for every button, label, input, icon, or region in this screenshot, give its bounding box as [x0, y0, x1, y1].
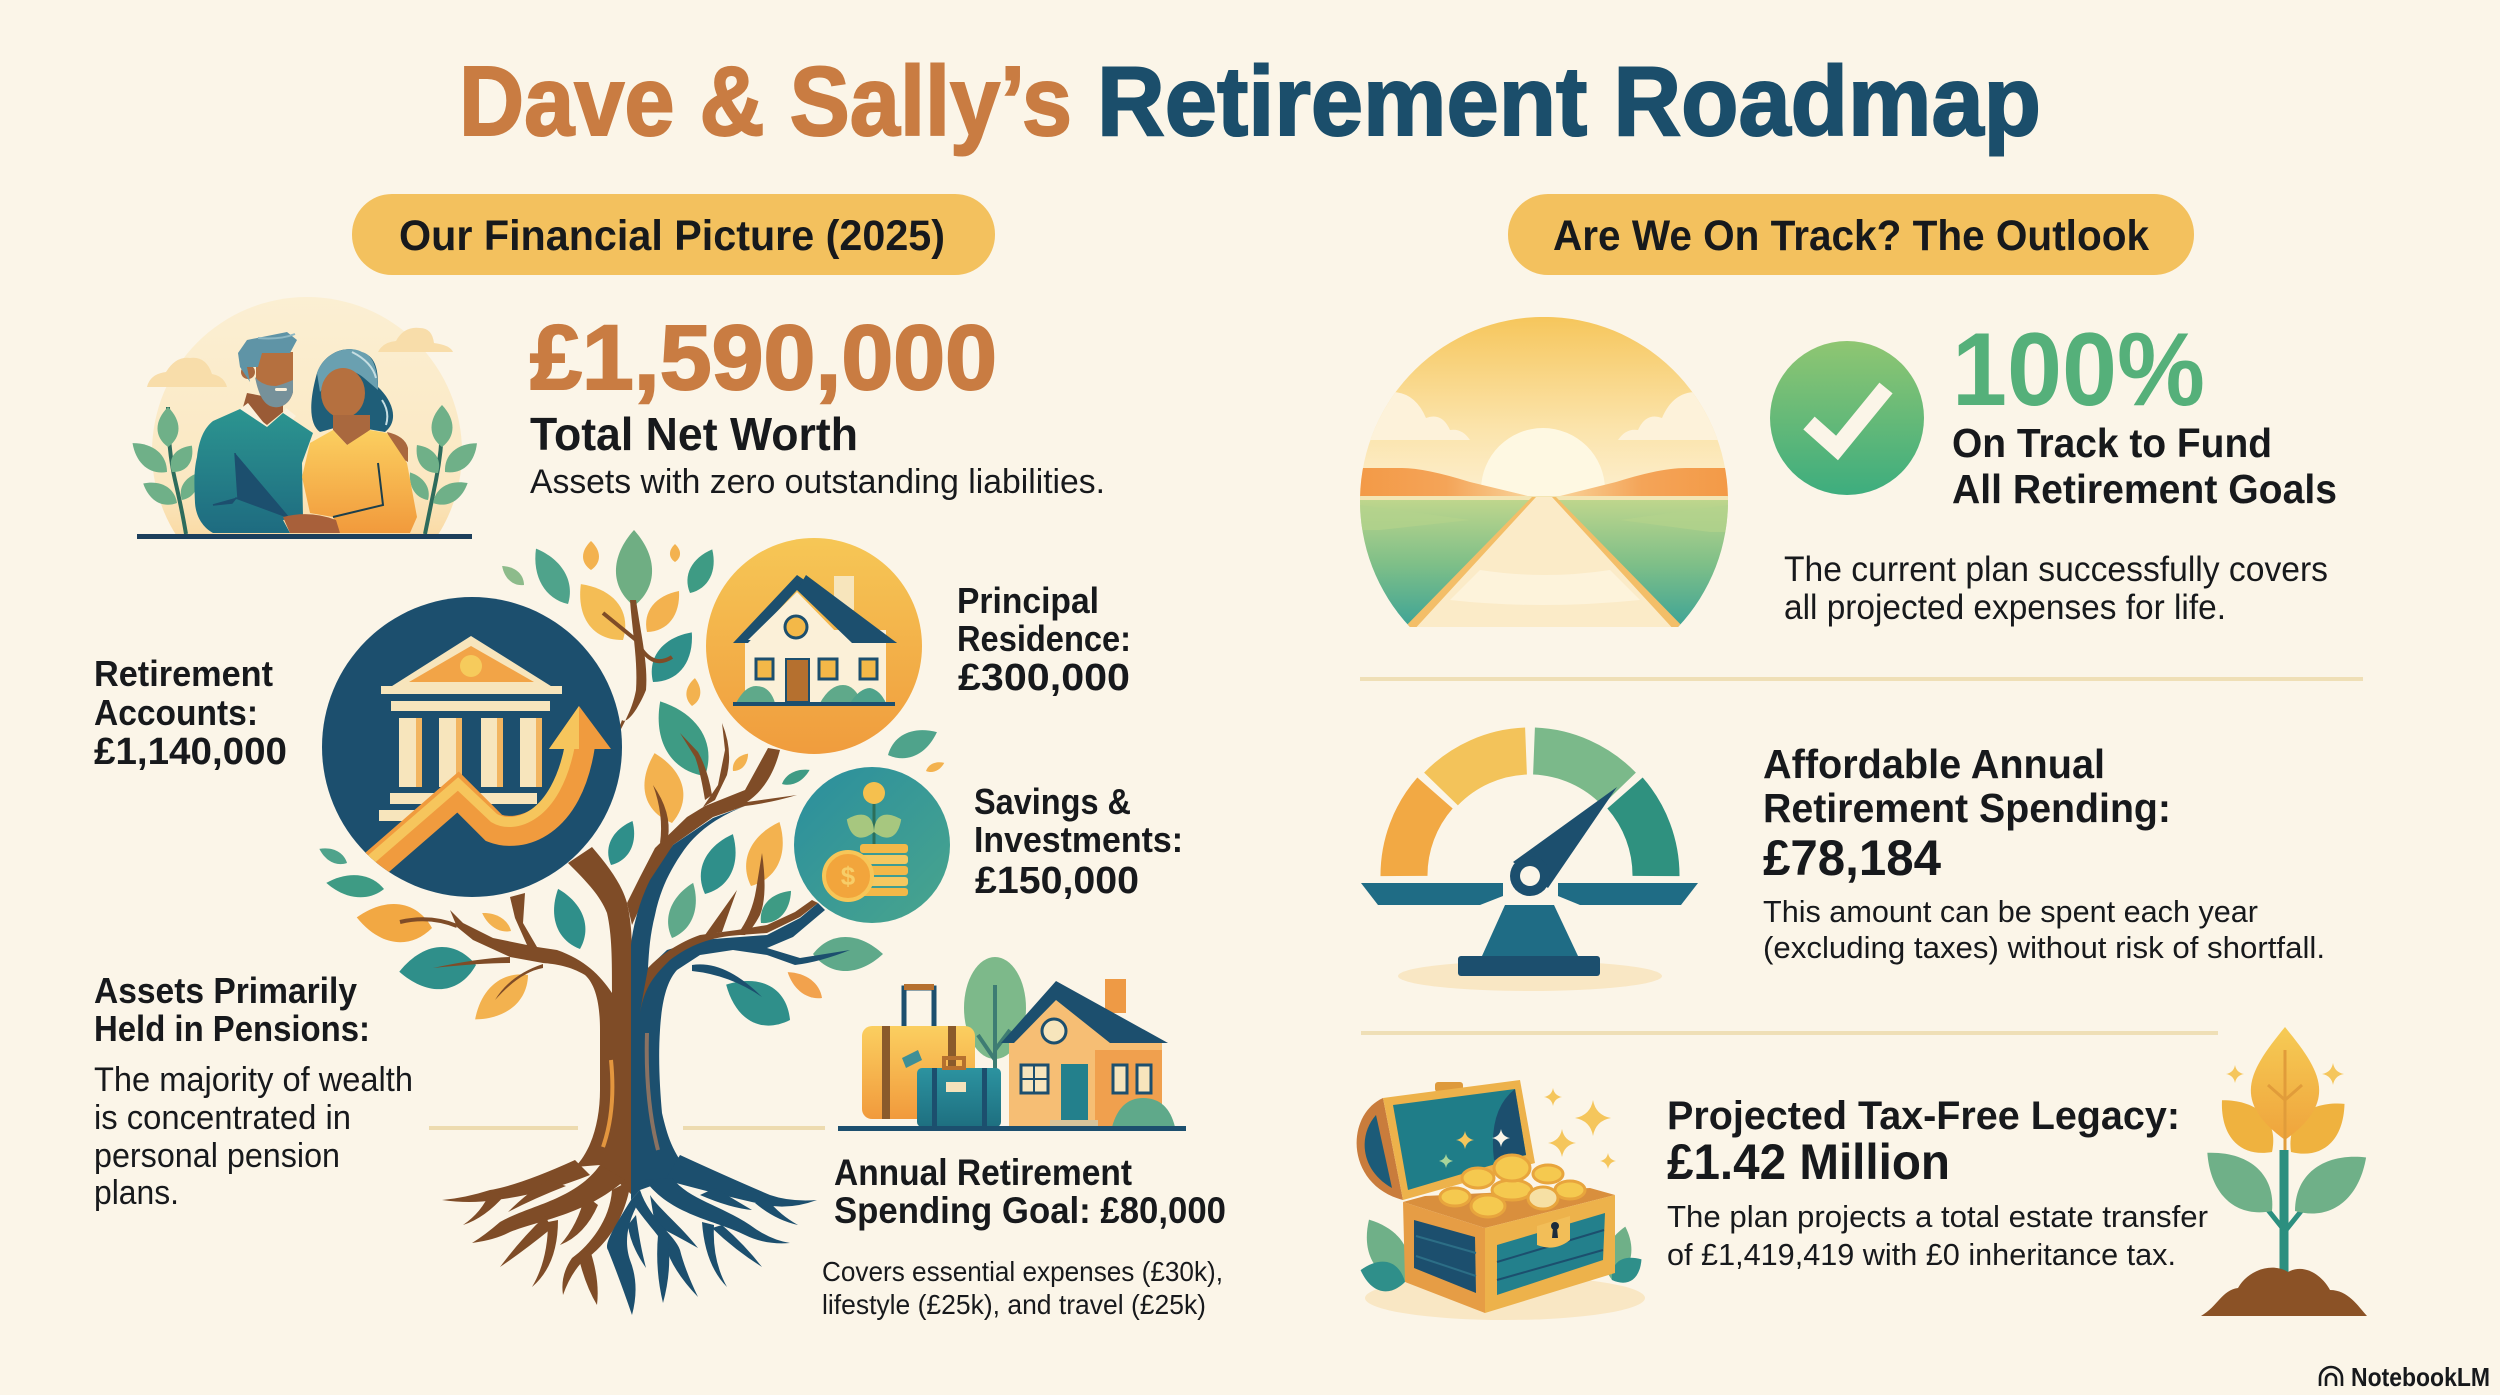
label: savings and investments: £150,000: [975, 860, 1139, 902]
text: tax-free legacy: The plan projects a total estate transfer: [1667, 1199, 2208, 1234]
text: assets primarily held in pensions: The majority of wealth: [94, 1061, 413, 1099]
text: affordable annual spending: £78,184: [1763, 830, 1941, 886]
text: assets primarily held in pensions: Assets Primarily: [94, 970, 357, 1011]
text: assets primarily held in pensions: plans.: [94, 1174, 179, 1212]
label: retirement accounts: Retirement: [94, 653, 273, 694]
stat: 100 percent on track: 100%: [1952, 312, 2205, 428]
label: savings and investments: Savings &: [974, 781, 1131, 822]
tree roots: [442, 1155, 817, 1315]
tree trunk and branches: [400, 600, 850, 1200]
text: assets primarily held in pensions: [94, 970, 413, 1212]
icon: growing plant: [2193, 1027, 2379, 1316]
title: Dave & Sally’s: [459, 46, 1072, 156]
label: principal residence: £300,000: [958, 657, 1130, 699]
label: savings and investments: Investments:: [974, 819, 1183, 860]
text: assets primarily held in pensions: Held in Pensions:: [94, 1008, 370, 1049]
text: affordable annual spending: Affordable Annual: [1763, 741, 2105, 787]
icon: bank with arrow: [322, 597, 622, 897]
icon: suitcases and house: [838, 957, 1186, 1131]
text: current plan: [1784, 550, 2328, 627]
text: tax-free legacy: [1667, 1094, 2208, 1272]
text: current plan: all projected expenses for life.: [1784, 588, 2226, 627]
text: annual retirement spending goal: [822, 1152, 1226, 1320]
text: tax-free legacy: Projected Tax-Free Legacy:: [1667, 1094, 2180, 1138]
icon: sunrise road: [1360, 317, 1728, 632]
icon: gauge scale: [1361, 751, 1698, 991]
icon: treasure chest: [1354, 1080, 1648, 1320]
text: tax-free legacy: £1.42 Million: [1667, 1134, 1950, 1190]
heading pill: financial picture: [352, 194, 995, 275]
label: principal residence: [957, 580, 1131, 699]
text: assets primarily held in pensions: personal pension: [94, 1137, 340, 1175]
chart: wealth tree: [317, 530, 950, 1315]
heading pill: financial picture: Our Financial Picture (2025): [399, 212, 945, 260]
text: affordable annual spending: (excluding taxes) without risk of shortfall.: [1763, 930, 2325, 965]
text: tax-free legacy: of £1,419,419 with £0 inheritance tax.: [1667, 1237, 2176, 1272]
stat: 100 percent on track: On Track to Fund: [1952, 420, 2272, 466]
ground dashes: [429, 1126, 825, 1130]
text: annual retirement spending goal: Spending Goal: £80,000: [834, 1190, 1226, 1231]
text: current plan: The current plan successfully covers: [1784, 550, 2328, 589]
text: affordable annual spending: This amount can be spent each year: [1763, 894, 2258, 929]
tree leaves: [317, 530, 946, 1037]
icon: savings circle: $: [841, 861, 856, 891]
icon: savings circle: [794, 767, 950, 923]
stat: 100 percent on track: [1952, 312, 2337, 512]
text: annual retirement spending goal: Annual Retirement: [834, 1152, 1132, 1193]
label: retirement accounts: [94, 653, 287, 773]
text: affordable annual spending: Retirement Spending:: [1763, 785, 2171, 831]
title: Retirement Roadmap: [1097, 46, 2041, 156]
icon: couple: [132, 297, 477, 539]
label: principal residence: Principal: [957, 580, 1099, 621]
label: retirement accounts: Accounts:: [94, 692, 258, 733]
icon: house circle: [706, 538, 922, 754]
text: annual retirement spending goal: lifestyle (£25k), and travel (£25k): [822, 1289, 1206, 1320]
text: assets primarily held in pensions: is concentrated in: [94, 1099, 351, 1137]
stat: net worth: Assets with zero outstanding liabilities.: [530, 463, 1105, 501]
heading pill: outlook: Are We On Track? The Outlook: [1553, 212, 2149, 260]
text: affordable annual spending: [1763, 741, 2325, 965]
stat: 100 percent on track: All Retirement Goals: [1952, 466, 2337, 512]
label: retirement accounts: £1,140,000: [94, 731, 287, 773]
text: annual retirement spending goal: Covers essential expenses (£30k),: [822, 1256, 1223, 1287]
title: [459, 46, 2041, 156]
icon: check badge: [1770, 341, 1924, 495]
stat: net worth: [530, 307, 1105, 501]
heading pill: outlook: [1508, 194, 2194, 275]
label: savings and investments: [974, 781, 1183, 902]
stat: net worth: £1,590,000: [530, 307, 997, 409]
label: principal residence: Residence:: [957, 618, 1131, 659]
stat: net worth: Total Net Worth: [530, 408, 858, 460]
